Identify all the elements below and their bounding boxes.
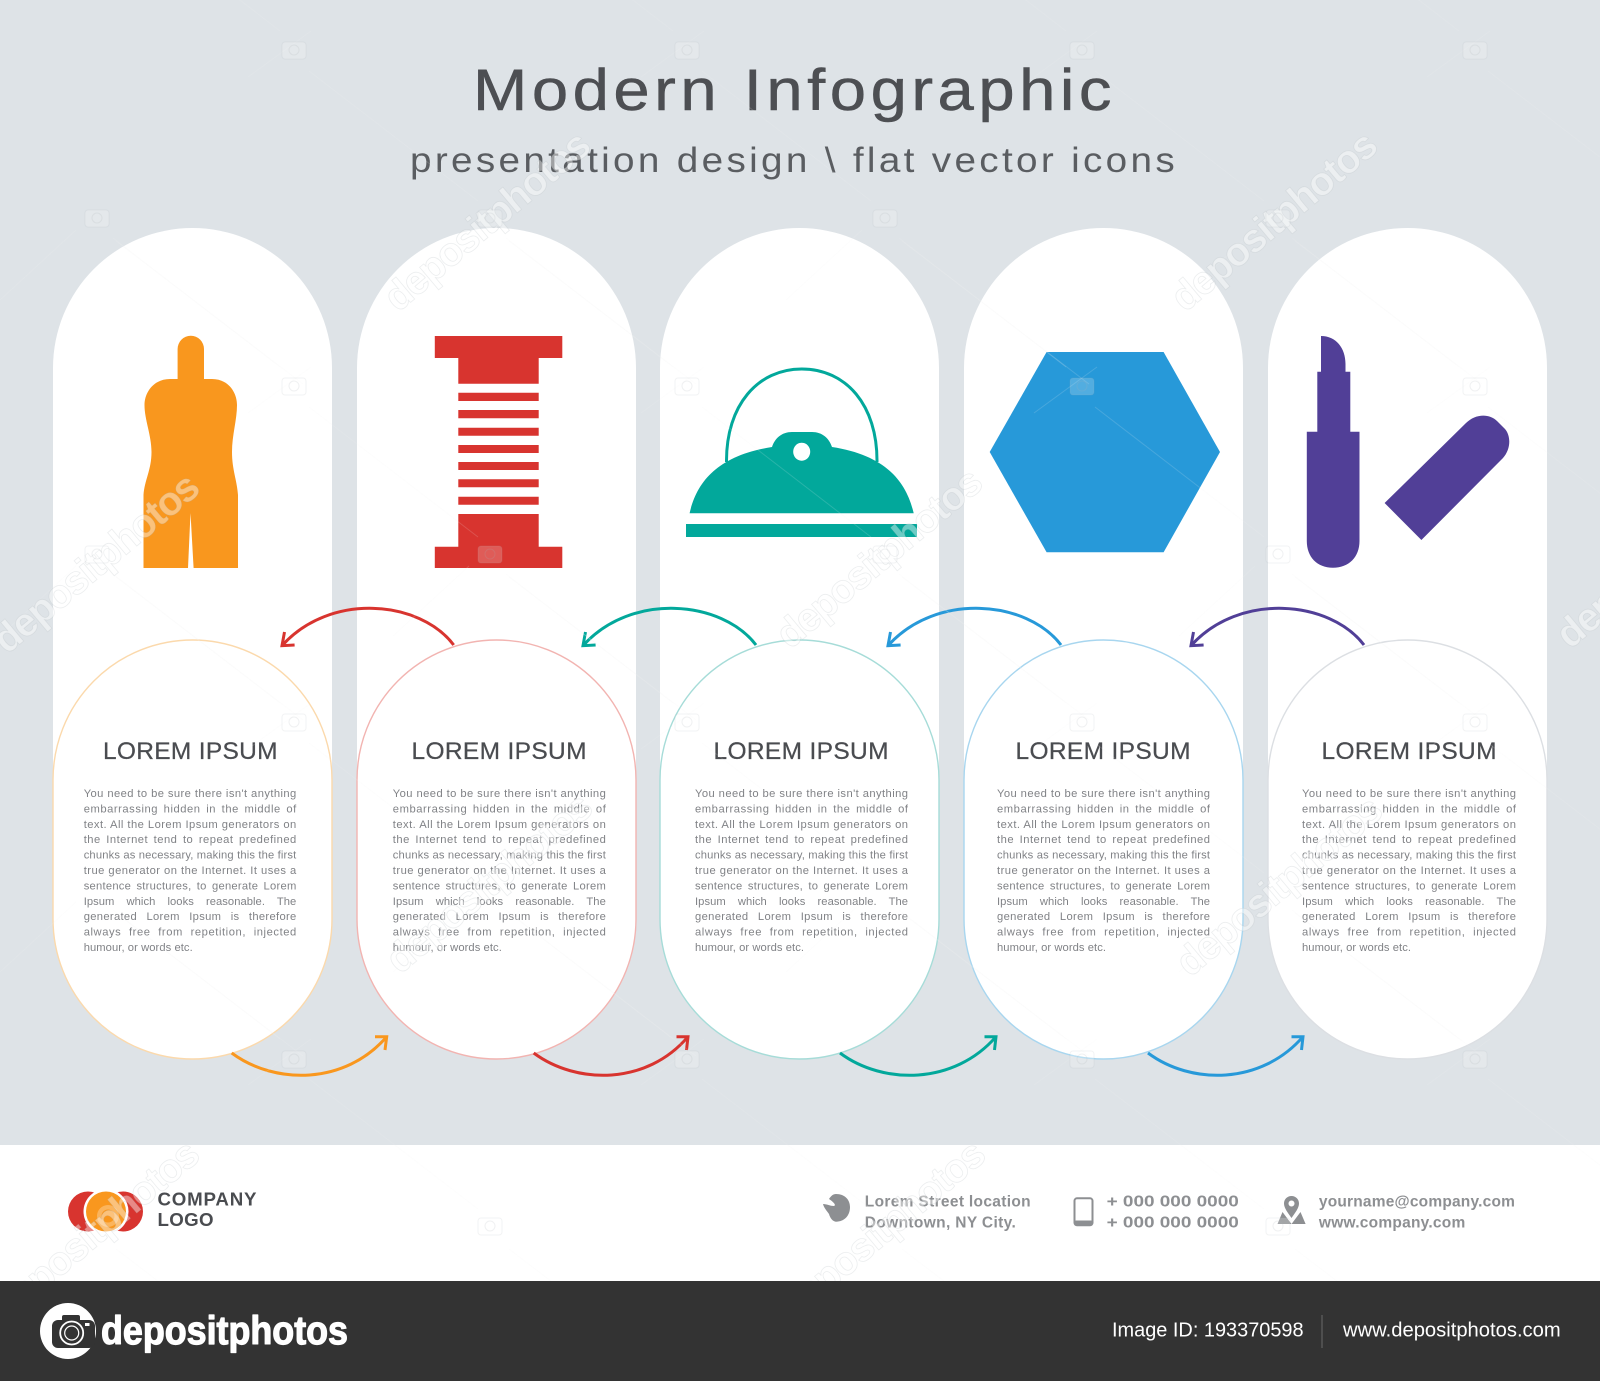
body text: the Internet tend to repeat predefined [393,834,606,846]
body text: sentence structures, to generate Lorem [695,880,908,892]
watermark overlay: depositphotos [1168,787,1391,985]
body text: Ipsum which looks reasonable. The [695,896,908,908]
arrow: red, back to panel 1 [282,608,454,646]
body text: embarrassing hidden in the middle of [393,803,607,815]
body text: chunks as necessary, making this the first [393,850,607,862]
body text: true generator on the Internet. It uses a [84,865,297,877]
body text: text. All the Lorem Ipsum generators on [1302,819,1516,831]
icon: hexagon [990,352,1220,552]
icon: thread spool [435,336,562,568]
icon: phone [1074,1198,1092,1226]
upper capsule [1268,228,1547,785]
logo mark [68,1189,143,1234]
body text: embarrassing hidden in the middle of [1302,803,1517,815]
arrow: teal, forward to panel 4 [840,1037,996,1075]
body text: the Internet tend to repeat predefined [997,834,1210,846]
icon: dress form [144,336,238,568]
body text: always free from repetition, injected [393,927,606,939]
watermark overlay: depositphotos [771,1131,994,1329]
body text: embarrassing hidden in the middle of [84,803,297,815]
icon: globe [823,1194,850,1222]
body text: text. All the Lorem Ipsum generators on [695,819,908,831]
body text: Ipsum which looks reasonable. The [393,896,606,908]
icon: map pin [1278,1196,1306,1224]
body text: text. All the Lorem Ipsum generators on [393,819,606,831]
body text: the Internet tend to repeat predefined [1302,834,1516,846]
icon: kettle [686,369,917,537]
body text: embarrassing hidden in the middle of [695,803,909,815]
phone numbers [1107,1194,1239,1232]
arrow: blue, forward to panel 5 [1148,1037,1303,1075]
heading: LOREM IPSUM [103,738,278,765]
body text [997,788,1211,954]
body text: sentence structures, to generate Lorem [1302,880,1516,892]
watermark overlay: depositphotos [1163,122,1386,320]
body text: Ipsum which looks reasonable. The [1302,896,1516,908]
web text [1318,1194,1515,1232]
attribution divider [1322,1315,1323,1348]
body text: Ipsum which looks reasonable. The [997,896,1210,908]
heading: LOREM IPSUM [412,738,586,765]
body text: You need to be sure there isn't anything [84,788,296,800]
body text: true generator on the Internet. It uses a [393,865,607,877]
body text: always free from repetition, injected [997,927,1210,939]
body text: humour, or words etc. [393,942,502,954]
contact: address [823,1194,1031,1232]
body text: always free from repetition, injected [695,927,908,939]
body text: generated Lorem Ipsum is therefore [1302,911,1516,923]
body text: always free from repetition, injected [1302,927,1516,939]
watermark overlay: depositphotos [376,122,599,320]
body text: sentence structures, to generate Lorem [84,880,296,892]
watermark overlay: depositphotos [768,459,991,657]
body text: You need to be sure there isn't anything [695,788,908,800]
body text: generated Lorem Ipsum is therefore [393,911,606,923]
body text: sentence structures, to generate Lorem [393,880,606,892]
body text: chunks as necessary, making this the first [1302,850,1517,862]
heading: LOREM IPSUM [714,738,888,765]
body text: humour, or words etc. [84,942,193,954]
lower oval [53,640,332,1059]
address text: Downtown, NY City. [865,1215,1016,1232]
body text: You need to be sure there isn't anything [997,788,1210,800]
body text: chunks as necessary, making this the first [84,850,297,862]
subtitle: presentation design \ flat vector icons [410,141,1178,180]
panel: hexagon [964,228,1243,1059]
body text: chunks as necessary, making this the first [695,850,909,862]
body text: true generator on the Internet. It uses a [1302,865,1517,877]
body text: text. All the Lorem Ipsum generators on [84,819,296,831]
body text: Ipsum which looks reasonable. The [84,896,296,908]
arrow: teal, back to panel 2 [583,608,756,646]
phone numbers: + 000 000 0000 [1107,1194,1239,1211]
arrow: red, forward to panel 3 [534,1037,688,1075]
upper capsule [660,228,939,785]
body text [695,788,909,954]
panel: dress form [53,228,332,1059]
watermark overlay: depositphotos [378,784,601,982]
lower oval [1268,640,1547,1059]
upper capsule [53,228,332,785]
upper capsule [964,228,1243,785]
icon: lipstick [1307,336,1509,568]
body text: true generator on the Internet. It uses a [997,865,1211,877]
body text: chunks as necessary, making this the first [997,850,1211,862]
logo text: LOGO [158,1209,214,1230]
body text: generated Lorem Ipsum is therefore [695,911,908,923]
body text: always free from repetition, injected [84,927,296,939]
body text: text. All the Lorem Ipsum generators on [997,819,1210,831]
body text: the Internet tend to repeat predefined [84,834,296,846]
arrow: orange, forward to panel 2 [232,1037,387,1075]
body text: humour, or words etc. [1302,942,1411,954]
panel: kettle [660,228,939,1059]
body text: the Internet tend to repeat predefined [695,834,908,846]
web text: www.company.com [1318,1215,1465,1232]
body text: sentence structures, to generate Lorem [997,880,1210,892]
body text [1302,788,1517,954]
body text [393,788,607,954]
logo text [158,1189,257,1230]
body text: generated Lorem Ipsum is therefore [84,911,296,923]
lower oval [357,640,636,1059]
heading: LOREM IPSUM [1016,738,1190,765]
body text: humour, or words etc. [997,942,1106,954]
address text: Lorem Street location [865,1194,1031,1211]
footer band [0,1145,1600,1281]
panel: lipstick [1268,228,1547,1059]
body text: generated Lorem Ipsum is therefore [997,911,1210,923]
company logo [68,1189,257,1234]
phone numbers: + 000 000 0000 [1107,1215,1239,1232]
site url: www.depositphotos.com [1342,1320,1561,1342]
attribution bar [0,1281,1600,1381]
body text: humour, or words etc. [695,942,804,954]
lower oval [660,640,939,1059]
depositphotos logo [40,1303,348,1359]
image id: Image ID: 193370598 [1112,1320,1304,1342]
upper capsule [357,228,636,785]
lower oval [964,640,1243,1059]
heading: LOREM IPSUM [1322,738,1496,765]
address text [865,1194,1031,1232]
wordmark: depositphotos [101,1309,348,1353]
title: Modern Infographic [473,58,1116,123]
body text: You need to be sure there isn't anything [393,788,606,800]
arrow: blue, back to panel 3 [888,608,1061,646]
contact: web [1278,1194,1515,1232]
body text: You need to be sure there isn't anything [1302,788,1516,800]
panel: thread spool [357,228,636,1059]
body text: true generator on the Internet. It uses a [695,865,909,877]
body text [84,788,297,954]
contact: phone [1074,1194,1239,1232]
logo text: COMPANY [158,1189,257,1210]
body text: embarrassing hidden in the middle of [997,803,1211,815]
arrow: purple, back to panel 4 [1191,608,1364,646]
icon: camera badge [40,1303,96,1359]
web text: yourname@company.com [1319,1194,1515,1211]
